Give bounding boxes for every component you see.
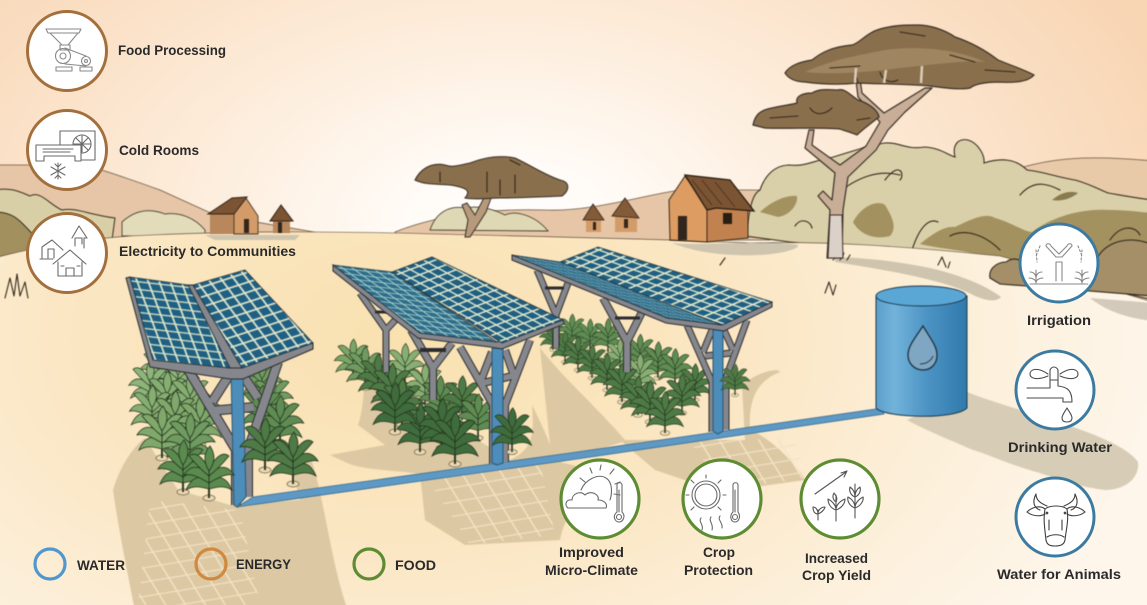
crops panel 3 back xyxy=(539,314,712,435)
benefit: irrigation xyxy=(1020,224,1098,328)
benefit: electricity to communities xyxy=(28,214,296,292)
front support panel 1 xyxy=(187,362,278,507)
icon: growing plants with arrow xyxy=(813,471,863,521)
benefit: increased crop yield: Increased xyxy=(805,551,868,566)
left bushes xyxy=(0,189,205,262)
big tree shadow xyxy=(835,257,1001,300)
icon: water drop xyxy=(908,326,937,370)
panel 2 middle leg xyxy=(411,330,452,400)
solar panel array 1 xyxy=(126,270,313,379)
legend xyxy=(35,549,436,579)
benefit: cold rooms xyxy=(28,110,199,190)
benefit: drinking water: Drinking Water xyxy=(1008,440,1113,455)
mid canopy xyxy=(415,157,568,199)
icon: sprinkler xyxy=(1029,244,1089,284)
village houses xyxy=(208,175,754,242)
right bushes xyxy=(745,140,1147,300)
landscape background xyxy=(0,140,1147,605)
benefit: drinking water xyxy=(1008,351,1113,455)
right edge shadow xyxy=(1090,298,1147,321)
benefit: improved micro-climate: Improved xyxy=(559,545,624,560)
lattice shadow 3 xyxy=(690,438,805,490)
legend: energy xyxy=(196,549,291,579)
panel 3 back leg xyxy=(537,270,568,348)
lower right bush xyxy=(990,240,1147,296)
lattice shadow 2 xyxy=(428,462,555,545)
solar panel array 3 xyxy=(512,247,772,331)
icon: cow xyxy=(1027,494,1085,546)
left house shadow xyxy=(205,235,300,240)
benefit: increased crop yield xyxy=(801,460,879,583)
tree trunk and branches xyxy=(805,72,932,258)
left hill xyxy=(0,165,320,262)
icon: sun, heat and thermometer xyxy=(686,475,739,530)
benefit: food processing: Food Processing xyxy=(118,43,226,58)
ground shadows with panel lattice xyxy=(113,348,805,605)
crops panel 2 back xyxy=(334,339,499,441)
front support panel 3 xyxy=(687,320,747,434)
benefit: increased crop yield: Crop Yield xyxy=(802,568,871,583)
panel 3 middle leg xyxy=(603,298,642,372)
legend: food: FOOD xyxy=(395,558,436,573)
benefit: improved micro-climate: Micro-Climate xyxy=(545,563,638,578)
benefit: food processing xyxy=(28,12,226,90)
front support panel 2 xyxy=(460,340,530,465)
benefit: improved micro-climate xyxy=(545,460,639,578)
benefit: electricity to communities: Electricity to Communities xyxy=(119,244,296,259)
benefit: irrigation: Irrigation xyxy=(1027,313,1091,328)
distant hut 1 xyxy=(583,204,604,232)
crops in front xyxy=(158,364,750,501)
solar panel array 2 xyxy=(333,257,564,349)
icon: tap xyxy=(1027,367,1078,422)
benefit: crop protection xyxy=(683,460,761,578)
big house shadow xyxy=(672,243,798,255)
big acacia tree xyxy=(753,25,1034,258)
upper canopy xyxy=(785,25,1034,89)
legend: water xyxy=(35,549,125,579)
crops panel 1 back xyxy=(129,346,304,468)
lattice shadow 1 xyxy=(138,500,260,605)
far right hill xyxy=(1020,158,1147,215)
left house xyxy=(208,197,258,234)
distant hut 2 xyxy=(612,198,639,232)
far middle hills xyxy=(395,190,770,240)
benefit: crop protection: Crop xyxy=(703,545,735,560)
ground xyxy=(0,232,1147,605)
legend: food xyxy=(354,549,436,579)
mid bushes xyxy=(430,207,548,231)
back and middle panel supports xyxy=(360,270,642,400)
icon: mill xyxy=(46,29,92,71)
panel 2 back leg xyxy=(360,293,398,372)
big house xyxy=(669,175,754,242)
benefit: cold rooms: Cold Rooms xyxy=(119,143,199,158)
grass tufts xyxy=(5,253,950,298)
icon: sun, cloud and thermometer xyxy=(566,465,624,522)
water pipe xyxy=(237,408,884,507)
small left hut xyxy=(270,205,293,233)
legend: water: WATER xyxy=(77,558,125,573)
panel 1 shadow xyxy=(113,438,348,605)
middle distance tree xyxy=(415,157,568,237)
lower canopy xyxy=(753,90,879,135)
icon: air conditioner xyxy=(36,131,95,179)
panel 2 shadow xyxy=(330,372,565,545)
benefit: crop protection: Protection xyxy=(684,563,753,578)
benefit: water for animals xyxy=(997,478,1121,582)
icon: houses xyxy=(40,226,87,276)
panel 3 shadow xyxy=(540,348,805,540)
water tank xyxy=(876,286,967,416)
benefit: water for animals: Water for Animals xyxy=(997,567,1121,582)
water tank shadow xyxy=(907,392,1138,490)
legend: energy: ENERGY xyxy=(236,557,291,572)
